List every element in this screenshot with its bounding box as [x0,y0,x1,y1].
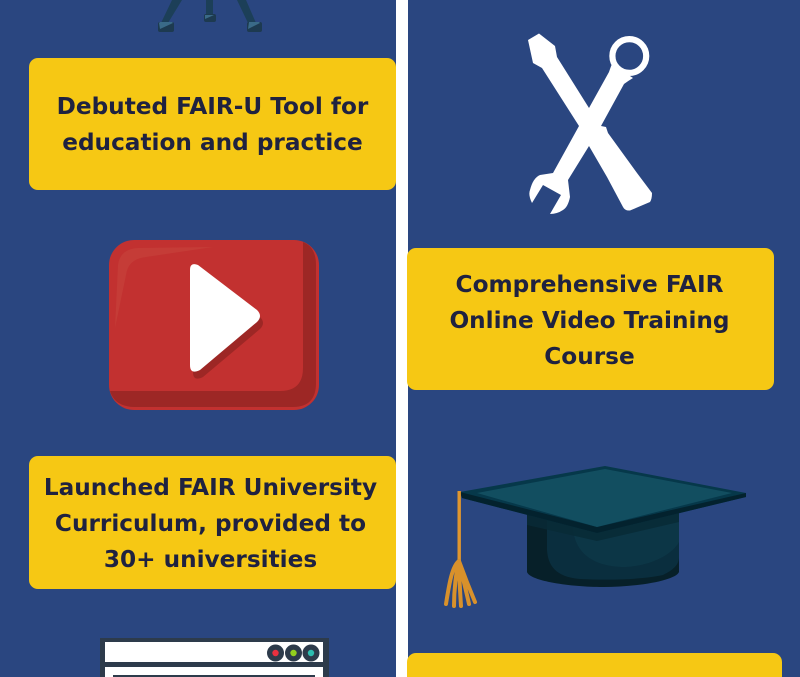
callout: video training course: Course [544,343,635,370]
callout: video training course: Comprehensive FAIR [456,271,723,298]
icon: tripod feet [158,0,262,32]
callout: FAIR-U Tool: Debuted FAIR-U Tool for [57,93,368,120]
callout: FAIR University Curriculum: 30+ universities [104,546,317,573]
icon: crossed tools [528,34,652,214]
icon: browser window [100,638,329,677]
icon: video play button [109,240,319,410]
callout: FAIR-U Tool: education and practice [62,129,363,156]
icon: graduation cap [446,466,746,606]
callout: FAIR University Curriculum [29,456,396,589]
callout: video training course [407,248,774,390]
callout: cropped bottom panel [407,653,782,677]
callout: FAIR University Curriculum: Launched FAIR University [44,474,377,501]
callout: video training course: Online Video Training [449,307,730,334]
callout: FAIR University Curriculum: Curriculum, provided to [55,510,366,537]
callout: FAIR-U Tool [29,58,396,190]
